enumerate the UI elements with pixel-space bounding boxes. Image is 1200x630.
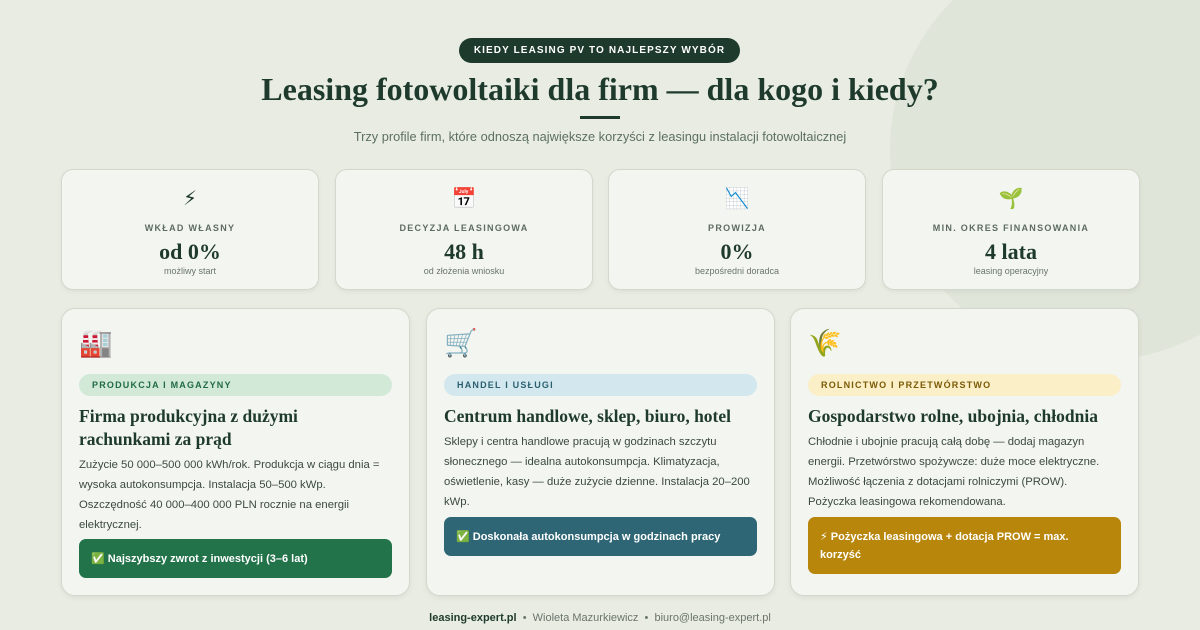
subtitle: Trzy profile firm, które odnoszą największe korzyści z leasingu instalacji fotowoltaicznej — [354, 129, 846, 144]
stat: decyzja: 📅 — [452, 188, 476, 210]
stat: wkład własny — [61, 169, 319, 290]
stat: wkład własny: ⚡ — [183, 188, 197, 210]
card: rolnictwo — [790, 308, 1139, 596]
stat: prowizja: PROWIZJA — [708, 223, 766, 233]
card: produkcja: Firma produkcyjna z dużymi — [79, 406, 298, 426]
card: handel: słonecznego — idealna autokonsumpcja. Klimatyzacja, — [444, 456, 720, 468]
card: handel: Sklepy i centra handlowe pracują w godzinach szczytu — [444, 436, 717, 448]
card: handel: 🛒 — [444, 328, 478, 358]
stat: wkład własny: od 0% — [159, 239, 221, 264]
stat: prowizja: 📉 — [725, 188, 749, 210]
stat: decyzja — [335, 169, 593, 290]
card: produkcja — [61, 308, 410, 596]
card: rolnictwo: korzyść — [820, 548, 861, 560]
card: handel: oświetlenie, kasy — duże zużycie dzienne. Instalacja 20–200 — [444, 476, 750, 488]
card: rolnictwo: ROLNICTWO I PRZETWÓRSTWO — [821, 380, 991, 390]
card: produkcja: wysoka autokonsumpcja. Instalacja 50–500 kWp. — [79, 479, 326, 491]
stat: wkład własny: WKŁAD WŁASNY — [145, 223, 235, 233]
stat: decyzja: od złożenia wniosku — [424, 266, 504, 276]
stat: prowizja — [608, 169, 866, 290]
stat: okres: leasing operacyjny — [974, 266, 1048, 276]
card: rolnictwo: Gospodarstwo rolne, ubojnia, chłodnia — [808, 406, 1098, 426]
stat: okres: MIN. OKRES FINANSOWANIA — [933, 223, 1089, 233]
card: rolnictwo: ⚡ Pożyczka leasingowa + dotacja PROW = max. — [820, 530, 1069, 542]
title: Leasing fotowoltaiki dla firm — dla kogo i kiedy? — [261, 71, 939, 107]
stat: okres: 4 lata — [985, 239, 1037, 264]
card: produkcja: rachunkami za prąd — [79, 429, 232, 449]
card: handel: Centrum handlowe, sklep, biuro, hotel — [444, 406, 731, 426]
card: rolnictwo: Możliwość łączenia z dotacjami rolniczymi (PROW). — [808, 476, 1067, 488]
footer: leasing-expert.pl • Wioleta Mazurkiewicz • biuro@leasing-expert.pl — [429, 612, 771, 624]
card: rolnictwo: 🌾 — [808, 328, 842, 358]
card: rolnictwo: energii. Przetwórstwo spożywcze: duże moce elektryczne. — [808, 456, 1099, 468]
stat: wkład własny: możliwy start — [164, 266, 216, 276]
stat: decyzja: DECYZJA LEASINGOWA — [399, 223, 529, 233]
card: rolnictwo: Pożyczka leasingowa rekomendowana. — [808, 496, 1006, 508]
card: handel — [426, 308, 775, 596]
card: produkcja: PRODUKCJA I MAGAZYNY — [92, 380, 232, 390]
card: produkcja: Oszczędność 40 000–400 000 PLN rocznie na energii — [79, 499, 349, 511]
card: produkcja: ✅ Najszybszy zwrot z inwestycji (3–6 lat) — [91, 552, 308, 564]
top pill — [459, 38, 740, 63]
stat: prowizja: 0% — [720, 239, 754, 264]
card: produkcja: Zużycie 50 000–500 000 kWh/rok. Produkcja w ciągu dnia = — [79, 459, 379, 471]
stat: prowizja: bezpośredni doradca — [695, 266, 779, 276]
card: rolnictwo: Chłodnie i ubojnie pracują całą dobę — dodaj magazyn — [808, 436, 1084, 448]
stat: decyzja: 48 h — [444, 239, 484, 264]
card: produkcja: elektrycznej. — [79, 519, 142, 531]
top pill: KIEDY LEASING PV TO NAJLEPSZY WYBÓR — [474, 45, 725, 56]
card: produkcja: 🏭 — [79, 328, 113, 358]
stat: okres: 🌱 — [999, 188, 1023, 210]
card: handel: HANDEL I USŁUGI — [457, 380, 554, 390]
card: handel: kWp. — [444, 496, 470, 508]
card: handel: ✅ Doskonała autokonsumpcja w godzinach pracy — [456, 530, 720, 542]
stat: okres — [882, 169, 1140, 290]
